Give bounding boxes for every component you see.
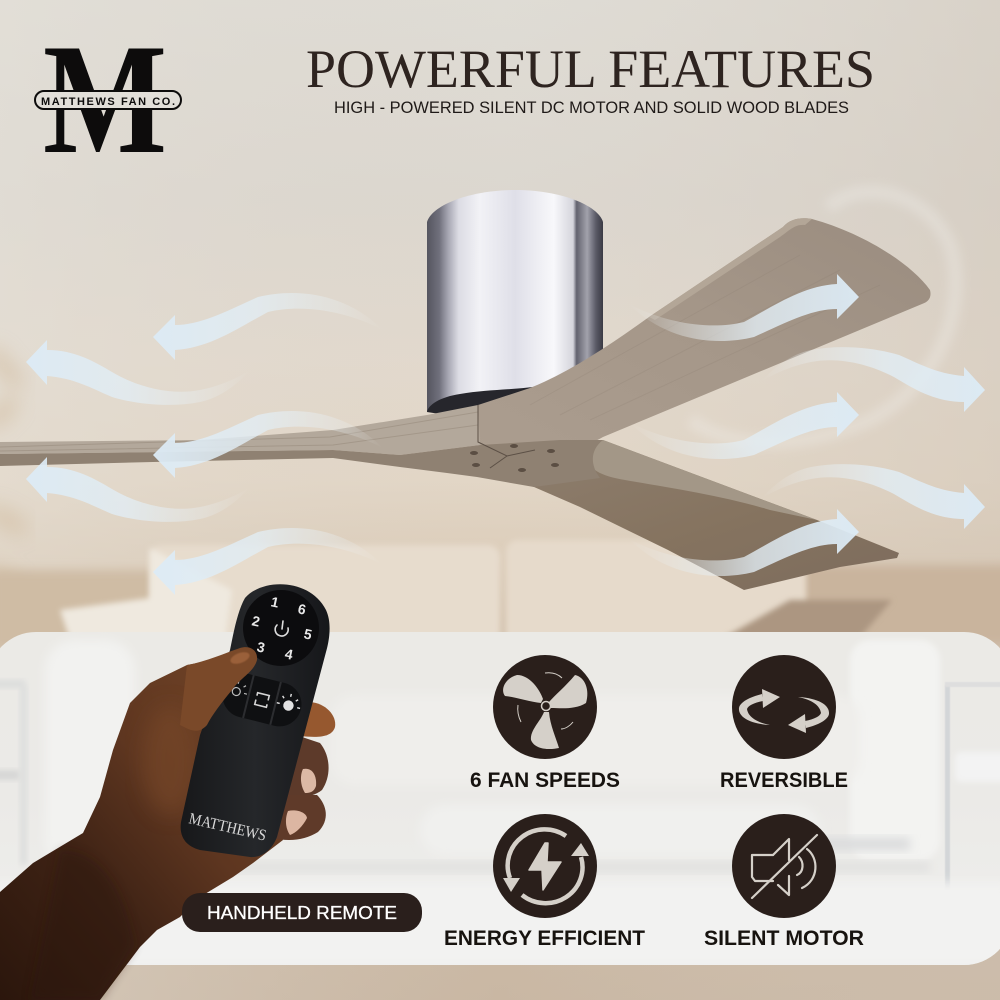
label: SILENT MOTOR bbox=[704, 927, 864, 950]
subtitle: HIGH - POWERED SILENT DC MOTOR AND SOLID WOOD BLADES bbox=[334, 99, 849, 117]
thumb tip highlight bbox=[229, 650, 251, 666]
ring fingernail bbox=[286, 810, 307, 835]
logo bbox=[35, 12, 181, 187]
icon: cycle bbox=[255, 693, 269, 707]
middle fingernail bbox=[301, 769, 316, 793]
arm and palm bbox=[0, 660, 283, 1000]
feature: energy efficient bbox=[444, 814, 645, 950]
fan blade: lower right bbox=[438, 440, 899, 590]
airflow arrows: right side bbox=[629, 274, 985, 576]
remote dial bbox=[243, 590, 319, 666]
hub seam bbox=[478, 405, 535, 468]
icon: bright light bbox=[276, 691, 303, 713]
motor underside bbox=[427, 385, 545, 414]
fan blade: left bbox=[0, 405, 603, 487]
panel backdrop: blurred white sofa bbox=[0, 640, 1000, 965]
hand holding remote bbox=[0, 584, 335, 1000]
label: ENERGY EFFICIENT bbox=[444, 927, 645, 950]
remote digits: 6 bbox=[297, 600, 308, 618]
icon: rotating arrows bbox=[732, 655, 836, 759]
icon: power button bbox=[275, 621, 288, 636]
remote digits: 2 bbox=[251, 612, 262, 630]
background: blurred sofa behind fan bbox=[0, 540, 1000, 650]
panel: features bbox=[0, 632, 1000, 965]
remote button pill bbox=[218, 669, 306, 731]
icon: fan bbox=[493, 655, 597, 759]
hub screws bbox=[470, 444, 559, 472]
wood grain lines bbox=[530, 255, 880, 420]
blade lighter inner edge bbox=[587, 440, 817, 520]
airflow arrows: left side bbox=[26, 293, 383, 595]
pill label: handheld remote: HANDHELD REMOTE bbox=[207, 902, 397, 923]
air swirl behind right blade bbox=[690, 192, 956, 443]
index finger behind remote bbox=[300, 702, 335, 737]
ring finger bbox=[272, 795, 326, 840]
title: POWERFUL FEATURES bbox=[306, 39, 875, 99]
middle finger bbox=[285, 735, 329, 797]
remote digits: 3 bbox=[256, 638, 267, 656]
icon: energy cycle bbox=[493, 814, 597, 918]
remote digits: 5 bbox=[303, 625, 314, 643]
remote body bbox=[181, 584, 330, 857]
pill label: handheld remote bbox=[182, 893, 422, 932]
remote brand text: MATTHEWS bbox=[187, 810, 268, 845]
thumb bbox=[180, 647, 257, 731]
feature: reversible bbox=[720, 655, 848, 792]
remote digits: 4 bbox=[284, 645, 295, 663]
remote digits bbox=[251, 593, 314, 663]
background: plant at left edge bbox=[0, 350, 25, 590]
remote digits: 1 bbox=[270, 593, 281, 611]
feature: 6 fan speeds bbox=[470, 655, 620, 792]
wrist shadow bbox=[30, 850, 135, 1000]
palm highlight bbox=[142, 705, 198, 815]
blade top highlight edge bbox=[649, 218, 812, 320]
fan blade: upper right bbox=[478, 218, 931, 455]
fan motor housing bbox=[427, 190, 603, 414]
label: 6 FAN SPEEDS bbox=[470, 769, 620, 792]
logo badge bbox=[35, 91, 181, 109]
feature: silent motor bbox=[704, 814, 864, 950]
icon: muted speaker bbox=[732, 814, 836, 918]
icon: dim light bbox=[225, 678, 250, 698]
wood grain lines bbox=[0, 412, 478, 451]
logo badge text: MATTHEWS FAN CO. bbox=[41, 96, 175, 108]
logo monogram M: M bbox=[43, 12, 167, 187]
label: REVERSIBLE bbox=[720, 769, 848, 792]
blade dark underside bbox=[0, 440, 603, 487]
